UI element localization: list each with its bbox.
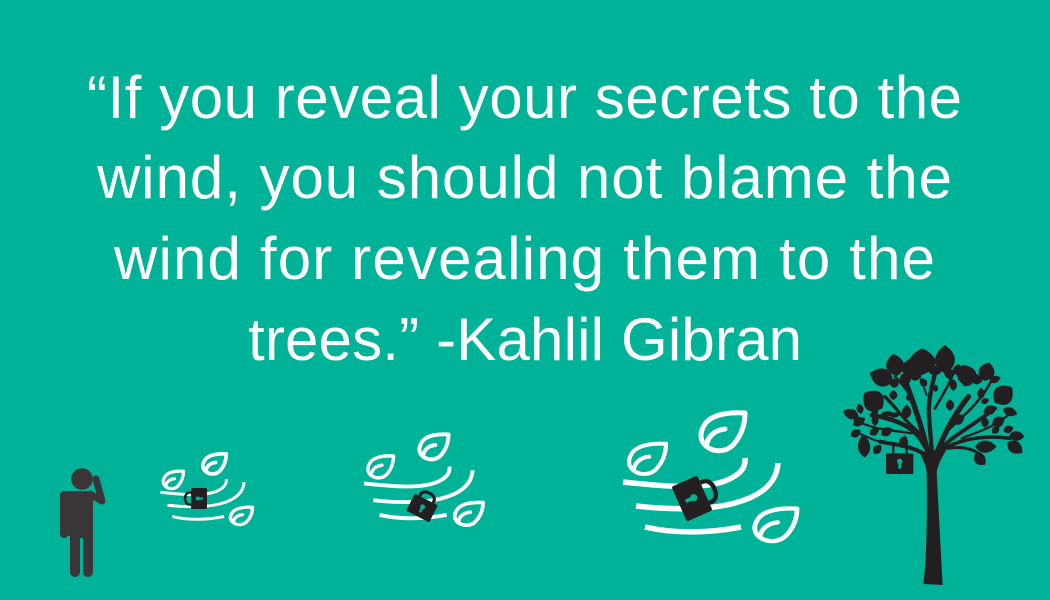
lock hanging from tree xyxy=(886,440,913,474)
quote text: wind for revealing them to the xyxy=(113,225,935,292)
icon: person whispering xyxy=(60,468,102,577)
tree leaves xyxy=(841,345,1026,469)
icon: small wind with secret lock xyxy=(160,454,252,525)
tree trunk xyxy=(920,447,948,585)
quote text: wind, you should not blame the xyxy=(96,144,952,211)
quote text: trees.” -Kahlil Gibran xyxy=(248,306,802,373)
icon: medium wind with secret lock xyxy=(364,434,483,525)
quote text: “If you reveal your secrets to the xyxy=(87,64,962,131)
tree branches xyxy=(855,373,1010,462)
icon: tree with lock xyxy=(841,345,1026,585)
quote text xyxy=(87,64,962,373)
icon: large wind with secret lock xyxy=(623,413,797,541)
